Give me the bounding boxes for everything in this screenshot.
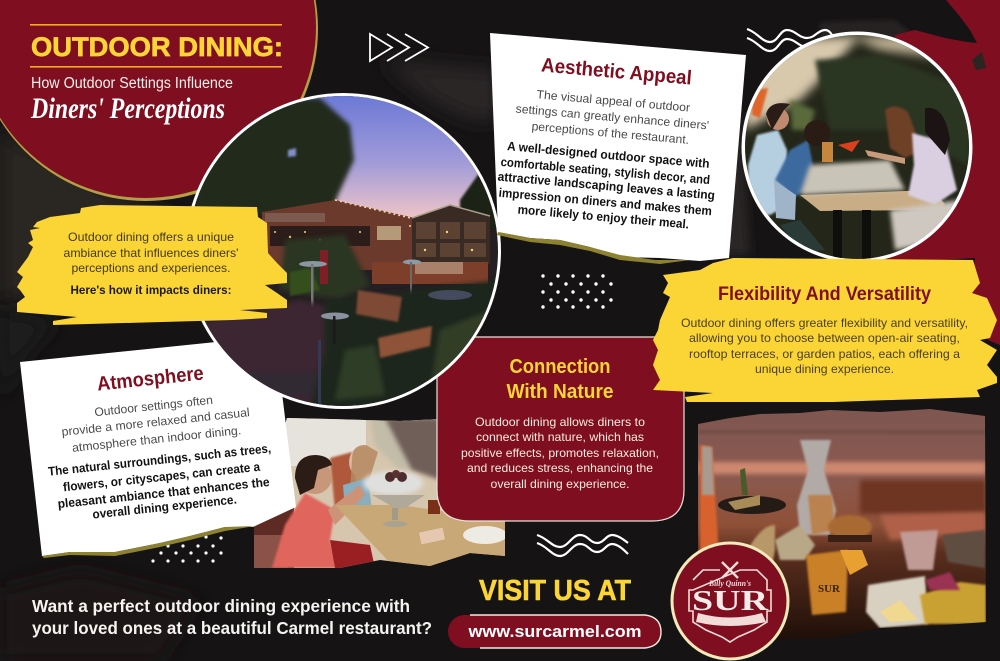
aesthetic bold text: impression on diners and makes them xyxy=(498,186,713,218)
connection heading: Connection xyxy=(510,356,610,378)
decoration: dots bottom xyxy=(151,535,223,563)
atmosphere bold text: The natural surroundings, such as trees, xyxy=(47,441,272,479)
intro text: Outdoor dining offers a unique xyxy=(68,230,234,244)
atmosphere bold text: overall dining experience. xyxy=(92,492,237,522)
flexibility body: unique dining experience. xyxy=(755,362,894,376)
intro text: Here's how it impacts diners: xyxy=(70,283,232,297)
connection body: connect with nature, which has xyxy=(476,430,644,444)
panel: yellow intro brush xyxy=(17,205,287,325)
panel: flexibility and versatility xyxy=(653,258,997,402)
connection body: and reduces stress, enhancing the xyxy=(467,461,653,475)
call to action: your loved ones at a beautiful Carmel restaurant? xyxy=(32,618,432,638)
photo: food spread: SUR xyxy=(818,583,841,595)
call to action: Want a perfect outdoor dining experience with xyxy=(32,596,410,616)
aesthetic bold text: comfortable seating, stylish decor, and xyxy=(500,155,711,187)
visit us heading: VISIT US AT xyxy=(479,575,631,607)
connection body xyxy=(461,415,659,491)
logo xyxy=(672,543,788,659)
connection heading xyxy=(506,356,614,403)
call to action xyxy=(32,596,432,638)
atmosphere intro text xyxy=(61,393,250,455)
aesthetic intro text xyxy=(515,87,710,147)
title circle xyxy=(0,0,318,201)
aesthetic bold text xyxy=(497,139,716,231)
aesthetic intro text: The visual appeal of outdoor xyxy=(536,87,691,115)
atmosphere heading: Atmosphere xyxy=(96,363,205,396)
aesthetic bold text: attractive landscaping leaves a lasting xyxy=(497,170,716,202)
atmosphere bold text xyxy=(47,441,272,522)
atmosphere bold text: flowers, or cityscapes, can create a xyxy=(62,460,262,494)
flexibility body: Outdoor dining offers greater flexibility and versatility, xyxy=(681,316,968,330)
atmosphere bold text: pleasant ambiance that enhances the xyxy=(57,475,270,511)
connection heading: With Nature xyxy=(506,381,614,403)
title block xyxy=(30,24,283,125)
title heading: OUTDOOR DINING: xyxy=(31,32,283,62)
flexibility body xyxy=(681,316,968,376)
connection body: overall dining experience. xyxy=(490,477,630,491)
photo: food spread xyxy=(698,409,986,641)
photo: children with dessert xyxy=(254,418,507,570)
panel: aesthetic appeal xyxy=(490,33,746,264)
logo: SUR xyxy=(692,586,769,617)
icon: wave bottom xyxy=(537,535,628,556)
red brush: top right xyxy=(850,0,1000,345)
icon: wave top xyxy=(747,29,833,51)
atmosphere intro text: atmosphere than indoor dining. xyxy=(71,423,242,455)
icon: triple arrows xyxy=(370,34,428,61)
flexibility body: allowing you to choose between open-air seating, xyxy=(689,331,960,345)
atmosphere intro text: Outdoor settings often xyxy=(94,393,213,419)
panel: connection with nature xyxy=(437,337,684,521)
aesthetic heading: Aesthetic Appeal xyxy=(540,54,693,90)
aesthetic bold text: A well-designed outdoor space with xyxy=(507,139,710,171)
logo: Billy Quinn's xyxy=(708,579,751,588)
subtitle: How Outdoor Settings Influence xyxy=(31,75,233,92)
aesthetic intro text: settings can greatly enhance diners' xyxy=(515,102,710,132)
atmosphere intro text: provide a more relaxed and casual xyxy=(61,405,250,439)
website pill xyxy=(448,615,661,648)
panel: atmosphere xyxy=(20,336,296,558)
aesthetic intro text: perceptions of the restaurant. xyxy=(531,119,690,147)
connection body: Outdoor dining allows diners to xyxy=(475,415,645,429)
intro text: ambiance that influences diners' xyxy=(64,246,238,260)
subtitle script: Diners' Perceptions xyxy=(30,92,225,125)
website pill: www.surcarmel.com xyxy=(467,622,642,641)
photo: main restaurant patio xyxy=(185,93,501,413)
flexibility heading: Flexibility And Versatility xyxy=(718,284,931,305)
aesthetic bold text: more likely to enjoy their meal. xyxy=(517,203,690,231)
intro text xyxy=(64,230,238,297)
intro text: perceptions and experiences. xyxy=(72,261,230,275)
connection body: positive effects, promotes relaxation, xyxy=(461,446,659,460)
flexibility body: rooftop terraces, or garden patios, each offering a xyxy=(689,347,960,361)
decoration: dots top xyxy=(541,274,613,309)
photo: family at table xyxy=(740,30,975,265)
